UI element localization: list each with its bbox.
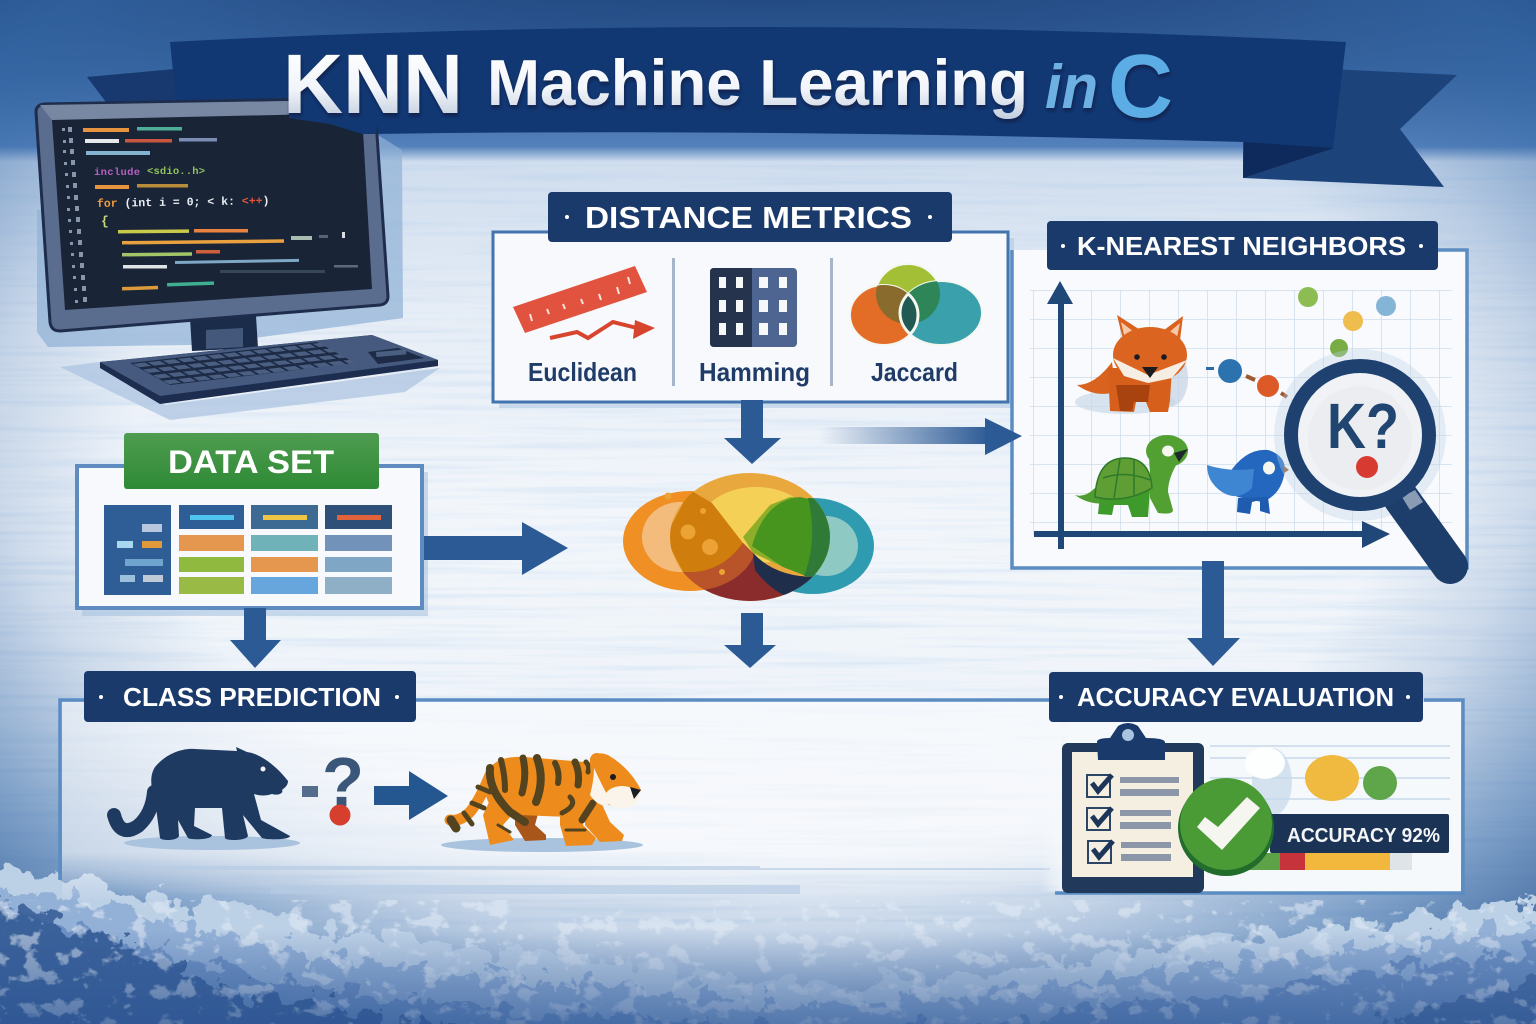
red query dot <box>1356 456 1378 478</box>
title text: KNN <box>283 37 463 131</box>
keyboard shadow <box>60 362 440 420</box>
icon: jaccard venn <box>850 264 982 345</box>
left circle <box>623 491 757 591</box>
accuracy label bar: ACCURACY 92% <box>1287 825 1440 847</box>
key well <box>130 342 355 385</box>
label: Euclidean: Euclidean <box>528 357 637 387</box>
heading: data set: DATA SET <box>168 444 334 480</box>
numeric pad <box>368 348 424 364</box>
arrow: data down <box>230 608 281 668</box>
panel faint lines <box>1210 745 1450 800</box>
accuracy label bar <box>1270 814 1449 853</box>
left overlap <box>670 492 743 572</box>
icon: question mark <box>302 743 364 826</box>
legs <box>483 800 514 845</box>
right circle <box>752 498 874 594</box>
heading: accuracy evaluation: ACCURACY EVALUATION <box>1077 682 1394 712</box>
stripes <box>451 758 593 832</box>
label: Jaccard: Jaccard <box>871 357 958 387</box>
heading: distance metrics: DISTANCE METRICS <box>585 200 912 235</box>
panel: k-nearest neighbors <box>1012 221 1467 568</box>
key rows <box>130 342 358 385</box>
code text: brace: { <box>101 214 109 229</box>
icon: ruler <box>513 266 655 339</box>
panel lower streaks <box>120 866 1050 894</box>
heading: distance metrics <box>548 192 952 242</box>
right overlap <box>743 497 830 577</box>
banner overlap patch <box>289 95 381 134</box>
keyboard top face <box>100 335 438 396</box>
monitor shadow <box>37 135 403 347</box>
middle circle <box>670 473 830 601</box>
keyboard body <box>100 335 438 404</box>
code text: header: <sdio..h> <box>147 166 205 178</box>
computer monitor with code <box>36 95 440 420</box>
title text: Machine Learning <box>487 46 1028 119</box>
tail <box>450 775 490 820</box>
venn spots <box>664 492 725 575</box>
panel: accuracy evaluation <box>1040 672 1463 893</box>
prediction panel frame <box>60 700 1060 880</box>
panel: distance metrics <box>493 192 1014 408</box>
divider <box>672 258 675 386</box>
lower overlap <box>683 543 812 601</box>
code text: include: include <box>94 167 140 179</box>
torso <box>485 757 600 817</box>
chart axes <box>1034 281 1390 549</box>
heading: accuracy evaluation <box>1049 672 1423 722</box>
heading: data set <box>124 433 379 489</box>
title text <box>283 37 1173 137</box>
monitor frame <box>36 98 388 331</box>
title banner ribbon <box>87 27 1457 187</box>
heading: k-nearest neighbors: K-NEAREST NEIGHBORS <box>1077 231 1406 261</box>
checklist <box>1087 775 1179 863</box>
title text: in <box>1045 53 1098 122</box>
left tail <box>87 69 180 115</box>
icon: tiger <box>441 753 643 852</box>
monitor stand <box>190 316 258 351</box>
metrics panel box <box>493 232 1008 402</box>
icon: central venn diagram <box>623 473 874 601</box>
right tail <box>1243 69 1457 187</box>
icon: question mark: ? <box>322 743 364 821</box>
data table <box>104 505 392 595</box>
arrow: venn down <box>724 613 776 668</box>
panel: class prediction <box>60 671 1062 902</box>
label: Hamming: Hamming <box>699 357 810 387</box>
frame top bevel <box>40 101 290 120</box>
heading: class prediction: CLASS PREDICTION <box>123 682 381 712</box>
line number gutter <box>62 127 87 303</box>
arrow: neighbors down <box>1187 561 1240 666</box>
icon: hamming grid <box>710 268 797 347</box>
data panel box <box>77 466 422 608</box>
keyboard <box>100 335 438 404</box>
code text: for loop: for (int i = 0; < k: <++) <box>97 195 270 211</box>
arrow: metrics to neighbors <box>820 418 1022 455</box>
icon: turtle <box>1075 435 1188 517</box>
stand highlight <box>206 328 243 349</box>
accuracy panel fill <box>1040 702 1461 892</box>
heading: class prediction <box>84 671 416 722</box>
K? label: K? <box>1327 390 1399 462</box>
title text: C <box>1108 37 1173 137</box>
icon: magnifying glass <box>1274 349 1450 566</box>
icon: clipboard <box>1062 723 1204 893</box>
ribbon body <box>170 27 1346 148</box>
arrow: data to venn <box>424 522 568 575</box>
ribbon fold <box>1243 140 1334 178</box>
accuracy progress bar <box>1245 853 1412 870</box>
icon: fox <box>1075 315 1188 414</box>
heading: k-nearest neighbors <box>1047 221 1438 270</box>
arrow: panther to tiger <box>374 771 448 820</box>
head <box>590 753 641 805</box>
icon: green check badge <box>1178 778 1274 876</box>
neighbors panel box <box>1012 250 1467 568</box>
chart grid <box>1030 290 1452 535</box>
panel: data set <box>77 433 428 616</box>
neighbor dots <box>1206 287 1396 397</box>
arrow: metrics down to venn <box>724 400 781 464</box>
icon: panther silhouette <box>114 747 300 850</box>
background blobs <box>1245 747 1397 816</box>
code lines <box>62 127 358 303</box>
accuracy panel frame <box>1055 700 1463 893</box>
icon: bird <box>1207 450 1289 514</box>
monitor screen <box>52 113 372 310</box>
prediction panel fill <box>62 702 1062 902</box>
